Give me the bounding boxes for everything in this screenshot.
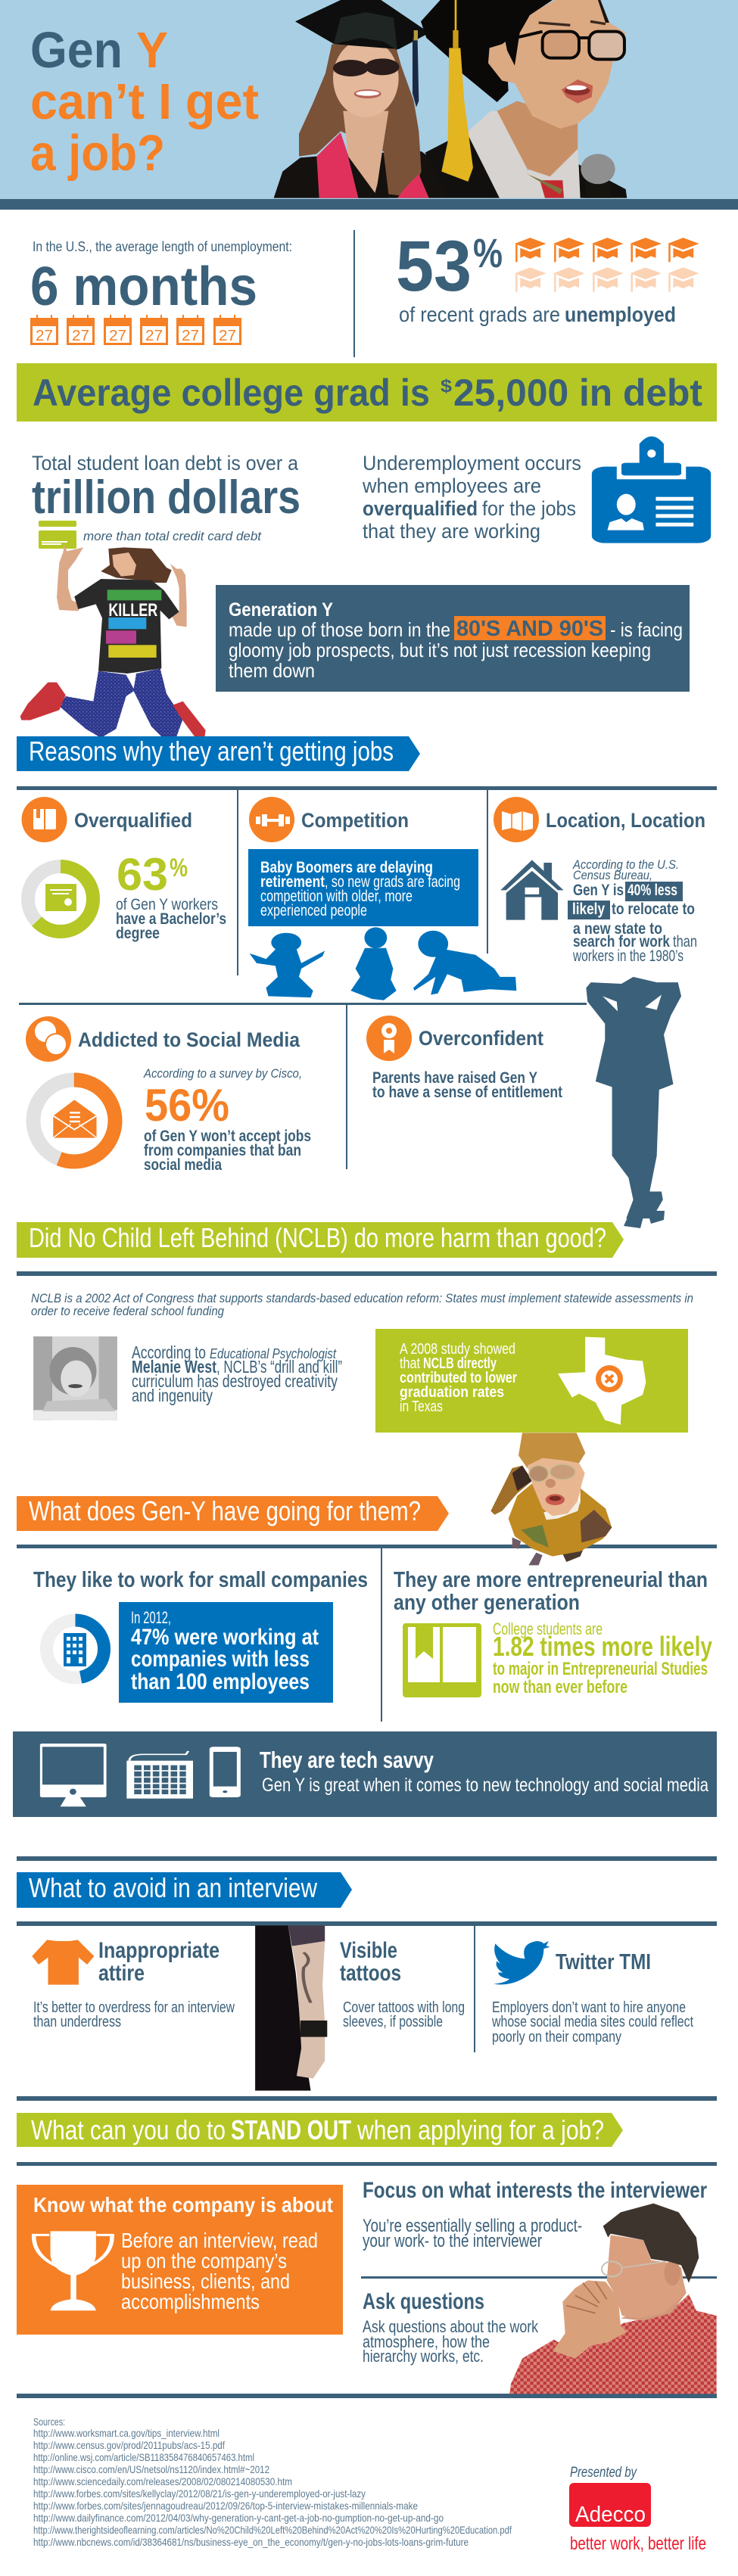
callout: 47 percent: companies with less	[131, 1647, 310, 1672]
panel: competition: Competition	[301, 809, 409, 832]
text: intro: In the U.S., the average length of unemployment:	[33, 239, 292, 254]
silhouette: man with hands behind head	[586, 977, 681, 1228]
panel: student loan debt	[32, 452, 300, 549]
panel: inappropriate attire: attire	[98, 1961, 145, 1986]
panel: texas study: that	[400, 1355, 420, 1372]
panel: social media: social media	[144, 1156, 222, 1174]
icon: twitter bird	[494, 1941, 550, 1984]
panel: entrepreneurial: College students are	[493, 1619, 603, 1638]
panel: overconfident: to have a sense of entitlement	[372, 1084, 562, 1101]
text: melanie west quote: Educational Psychologist	[210, 1346, 337, 1361]
text: sources: http://www.forbes.com/sites/kellyclay/2012/08/21/is-gen-y-underemployed-or-just-lazy	[33, 2487, 366, 2500]
panel: location: According to the U.S.	[572, 857, 679, 872]
caption: unemployed	[565, 303, 676, 326]
panel: generation y: gloomy job prospects, but it’s not just recession keeping	[229, 639, 651, 661]
panel: know the company: up on the company’s	[121, 2249, 287, 2273]
panel: know the company: Before an interview, read	[121, 2229, 318, 2252]
panel: focus on interviewer	[363, 2178, 707, 2251]
text: sources	[33, 2416, 512, 2548]
icon: trophy	[34, 2231, 112, 2310]
panel: twitter tmi: whose social media sites could reflect	[491, 2014, 693, 2030]
banner: stand out: when applying for a job?	[357, 2114, 604, 2145]
panel: generation y: Generation Y	[229, 599, 333, 621]
panel: focus on interviewer: You’re essentially selling a product-	[363, 2216, 582, 2236]
icons: calendars: 27	[145, 328, 163, 344]
photo: melanie west	[33, 1336, 117, 1420]
icon: ribbon	[366, 1016, 412, 1061]
callout: baby boomers	[248, 849, 478, 926]
icons: calendars: 27	[182, 328, 199, 344]
panel: ask questions: Ask questions	[363, 2289, 484, 2314]
text: sources: Sources:	[33, 2416, 65, 2428]
icon: monitor	[40, 1744, 107, 1806]
panel: texas study: contributed to lower	[400, 1370, 517, 1386]
stat: 56%: 56%	[145, 1080, 229, 1131]
chart: 56 percent donut	[33, 1080, 115, 1162]
banner: average debt: $	[441, 376, 453, 397]
text: melanie west quote: curriculum has destroyed creativity	[132, 1371, 338, 1391]
panel: social media: According to a survey by Cisco,	[143, 1066, 302, 1081]
panel: know the company	[17, 2185, 343, 2335]
panel: social media	[26, 1016, 311, 1174]
icon: book	[21, 797, 67, 842]
panel: twitter tmi: poorly on their company	[492, 2029, 621, 2046]
panel: inappropriate attire: It’s better to overdress for an interview	[33, 1999, 235, 2016]
text: nclb definition: order to receive federal school funding	[31, 1304, 224, 1318]
panel: location: a new state to	[573, 920, 662, 938]
logo: adecco: Presented by	[570, 2465, 637, 2481]
photo: jumping girl: KILLER	[108, 600, 157, 621]
text: sources: http://www.sciencedaily.com/releases/2008/02/080214080530.htm	[33, 2475, 292, 2487]
text: sources: http://www.worksmart.ca.gov/tips_interview.html	[33, 2427, 220, 2439]
panel: location: workers in the 1980’s	[572, 947, 684, 965]
icons: graduation caps	[515, 238, 699, 292]
photo: boy with glasses	[490, 1433, 612, 1565]
banner: stand out: What can you do to	[31, 2114, 226, 2145]
panel: texas study: graduation rates	[400, 1384, 504, 1401]
title: can’t I get	[30, 73, 259, 130]
panel: tech savvy	[13, 1731, 717, 1817]
icon: credit card	[39, 521, 76, 549]
banner: what to avoid: What to avoid in an interview	[29, 1872, 318, 1903]
panel: underemployment	[362, 437, 711, 543]
icon: keyboard	[126, 1751, 193, 1799]
panel: overconfident	[366, 1016, 562, 1101]
panel: location: to relocate to	[612, 901, 695, 918]
callout: baby boomers: competition with older, more	[260, 888, 413, 905]
logo: adecco	[569, 2465, 706, 2554]
panel: location	[494, 797, 705, 965]
logo: adecco: Adecco	[575, 2503, 646, 2527]
panel: location: Gen Y is	[573, 882, 624, 899]
callout: baby boomers: , so new grads are facing	[325, 873, 460, 891]
title: a job?	[30, 125, 165, 182]
panel: overqualified: have a Bachelor’s	[116, 910, 226, 928]
icons: calendars: 27	[36, 328, 53, 344]
panel: texas study: A 2008 study showed	[400, 1341, 515, 1358]
panel: generation y: them down	[229, 659, 315, 682]
banner: average debt	[17, 363, 717, 422]
icons: calendars: 27	[109, 328, 126, 344]
callout: 40 percent less likely: likely	[572, 901, 605, 918]
callout: 80s and 90s: 80'S AND 90'S	[456, 617, 603, 641]
panel: inappropriate attire: than underdress	[33, 2014, 121, 2030]
panel: location: Location, Location	[546, 809, 705, 832]
callout: 47 percent: 47% were working at	[131, 1625, 319, 1650]
panel: small companies: They like to work for small companies	[33, 1568, 368, 1592]
icon: map	[494, 797, 539, 842]
heading: Overqualified	[74, 809, 192, 832]
icons: calendars: 27	[219, 328, 236, 344]
stat: 63%: %	[170, 854, 188, 882]
panel: social media: of Gen Y won’t accept jobs	[144, 1128, 311, 1145]
chart: 47 percent donut	[47, 1620, 104, 1678]
banner: what does gen-y have going for them: What does Gen-Y have going for them?	[29, 1495, 421, 1526]
header panel	[0, 0, 738, 210]
panel: 53 percent unemployed	[396, 226, 699, 326]
panel: visible tattoos: sleeves, if possible	[343, 2014, 443, 2030]
stat: 53%: %	[473, 231, 503, 276]
banner: reasons: Reasons why they aren’t getting jobs	[29, 736, 394, 767]
panel: know the company: Know what the company is about	[33, 2193, 333, 2217]
panel: visible tattoos	[340, 1938, 465, 2030]
panel: generation y: made up of those born in the	[229, 618, 450, 641]
icon: t-shirt	[32, 1940, 94, 1985]
panel: know the company: business, clients, and	[121, 2270, 290, 2293]
panel: generation y: - is facing	[610, 618, 683, 641]
text: melanie west quote: According to	[132, 1342, 206, 1362]
callout: 40 percent less likely: 40% less	[627, 882, 677, 899]
callout: 47 percent	[119, 1602, 333, 1703]
panel: focus on interviewer: your work- to the interviewer	[363, 2231, 542, 2251]
panel: underemployment: Underemployment occurs	[363, 452, 581, 474]
panel: texas study: NCLB directly	[423, 1355, 497, 1372]
panel: overqualified: degree	[116, 925, 160, 942]
callout: 47 percent: In 2012,	[131, 1608, 171, 1627]
stat: 6 months: 6 months	[30, 257, 257, 317]
chart: 63 percent donut	[28, 866, 93, 932]
photo: jumping girl	[20, 545, 206, 739]
title: Y	[136, 22, 168, 79]
stat: 53%: 53	[396, 226, 472, 306]
callout: baby boomers: retirement	[260, 873, 325, 891]
text: sources: http://online.wsj.com/article/SB118358476840657463.html	[33, 2451, 254, 2463]
icons: calendars: 27	[72, 328, 89, 344]
text: sources: http://www.forbes.com/sites/jennagoudreau/2012/09/26/top-5-interview-mistakes-millennials-make	[33, 2500, 418, 2512]
text: melanie west quote: Melanie West	[132, 1357, 216, 1377]
panel: entrepreneurial: now than ever before	[493, 1677, 627, 1697]
panel: location: search for work	[573, 933, 670, 950]
panel: know the company: accomplishments	[121, 2290, 260, 2313]
icon: texas map	[558, 1337, 646, 1425]
banner: average debt: 25,000 in debt	[453, 372, 702, 414]
panel: visible tattoos: Cover tattoos with long	[343, 1999, 465, 2016]
panel: student loan debt: more than total credit card debt	[83, 529, 262, 543]
icon: dumbbell	[249, 797, 294, 842]
callout: baby boomers: Baby Boomers are delaying	[260, 859, 433, 876]
panel: underemployment: that they are working	[363, 520, 540, 543]
text: melanie west quote: , NCLB’s “drill and kill”	[216, 1357, 342, 1377]
panel: underemployment: when employees are	[362, 474, 541, 497]
caption	[399, 303, 676, 326]
text: nclb definition	[31, 1291, 693, 1318]
panel: twitter tmi	[491, 1941, 693, 2046]
photo: graduates	[274, 0, 627, 198]
panel: twitter tmi: Twitter TMI	[556, 1950, 651, 1974]
caption: of recent grads are	[399, 303, 560, 326]
stat: trillion dollars: trillion dollars	[32, 471, 300, 524]
callout: baby boomers: experienced people	[260, 902, 367, 919]
callout: 40 percent less likely	[568, 882, 683, 919]
icon: phone	[210, 1747, 241, 1797]
banner: average debt: Average college grad is	[33, 372, 430, 414]
panel: visible tattoos: tattoos	[340, 1961, 401, 1986]
panel: twitter tmi: Employers don’t want to hire anyone	[492, 1999, 686, 2016]
title: Gen	[30, 22, 123, 79]
panel: overconfident: Overconfident	[419, 1027, 543, 1050]
panel: entrepreneurial: any other generation	[394, 1591, 580, 1615]
panel: location: than	[673, 933, 697, 950]
icon: speech bubbles	[26, 1016, 71, 1062]
panel: entrepreneurial	[394, 1568, 712, 1697]
icon: open book	[403, 1623, 481, 1697]
panel: overqualified	[21, 797, 226, 942]
banner: nclb: Did No Child Left Behind (NCLB) do more harm than good?	[29, 1222, 606, 1253]
panel: tech savvy: They are tech savvy	[260, 1747, 434, 1773]
panel: overqualified: of Gen Y workers	[116, 896, 218, 913]
panel: visible tattoos: Visible	[340, 1938, 397, 1963]
panel: texas study: in Texas	[400, 1398, 443, 1415]
photo: tattooed arm	[255, 1925, 327, 2091]
text: sources: http://www.census.gov/prod/2011pubs/acs-15.pdf	[33, 2439, 225, 2451]
panel: social media: from companies that ban	[144, 1142, 301, 1159]
title	[30, 22, 259, 182]
icons: baby silhouettes	[250, 927, 516, 1000]
text: sources: http://www.cisco.com/en/US/netsol/ns1120/index.html#~2012	[33, 2463, 269, 2475]
panel: inappropriate attire	[32, 1938, 235, 2030]
icon: house	[500, 860, 564, 920]
text: sources: http://www.dailyfinance.com/2012/04/03/why-generation-y-cant-get-a-job-no-gumption-no-get-up-and-go	[33, 2512, 444, 2524]
text: melanie west quote: and ingenuity	[132, 1386, 213, 1405]
panel: ask questions: hierarchy works, etc.	[363, 2347, 484, 2366]
panel: ask questions: Ask questions about the work	[363, 2317, 539, 2336]
callout: 47 percent: than 100 employees	[131, 1669, 310, 1694]
panel: ask questions	[363, 2289, 539, 2366]
stat: 63%: 63	[117, 849, 168, 900]
icons: calendars	[30, 315, 241, 345]
panel: social media: Addicted to Social Media	[78, 1028, 300, 1051]
panel: inappropriate attire: Inappropriate	[98, 1938, 220, 1963]
panel: student loan debt: Total student loan debt is over a	[32, 452, 299, 474]
panel: small companies	[33, 1568, 368, 1703]
panel: underemployment: for the jobs	[482, 497, 576, 520]
panel: unemployment length	[30, 239, 292, 345]
text: melanie west quote	[132, 1342, 342, 1405]
banner: stand out: STAND OUT	[231, 2114, 351, 2145]
panel: competition	[248, 797, 516, 1000]
panel: ask questions: atmosphere, how the	[363, 2332, 490, 2351]
panel: location: Census Bureau,	[573, 868, 652, 882]
text: sources: http://www.therightsideoflearning.com/articles/No%20Child%20Left%20Behind%20Act%20%20Is%20Hurting%20Education.pdf	[33, 2524, 512, 2536]
panel: overconfident: Parents have raised Gen Y	[372, 1069, 537, 1087]
panel: underemployment: overqualified	[363, 497, 478, 520]
text: sources: http://www.nbcnews.com/id/38364681/ns/business-eye_on_the_economy/t/gen-y-no-jobs-lots-loans-grim-future	[33, 2536, 469, 2548]
banner: stand out	[17, 2113, 623, 2147]
icon: id badge	[592, 437, 711, 543]
photo: thinking man	[509, 2204, 717, 2394]
panel: texas study	[375, 1329, 688, 1433]
panel: generation y	[216, 585, 690, 692]
